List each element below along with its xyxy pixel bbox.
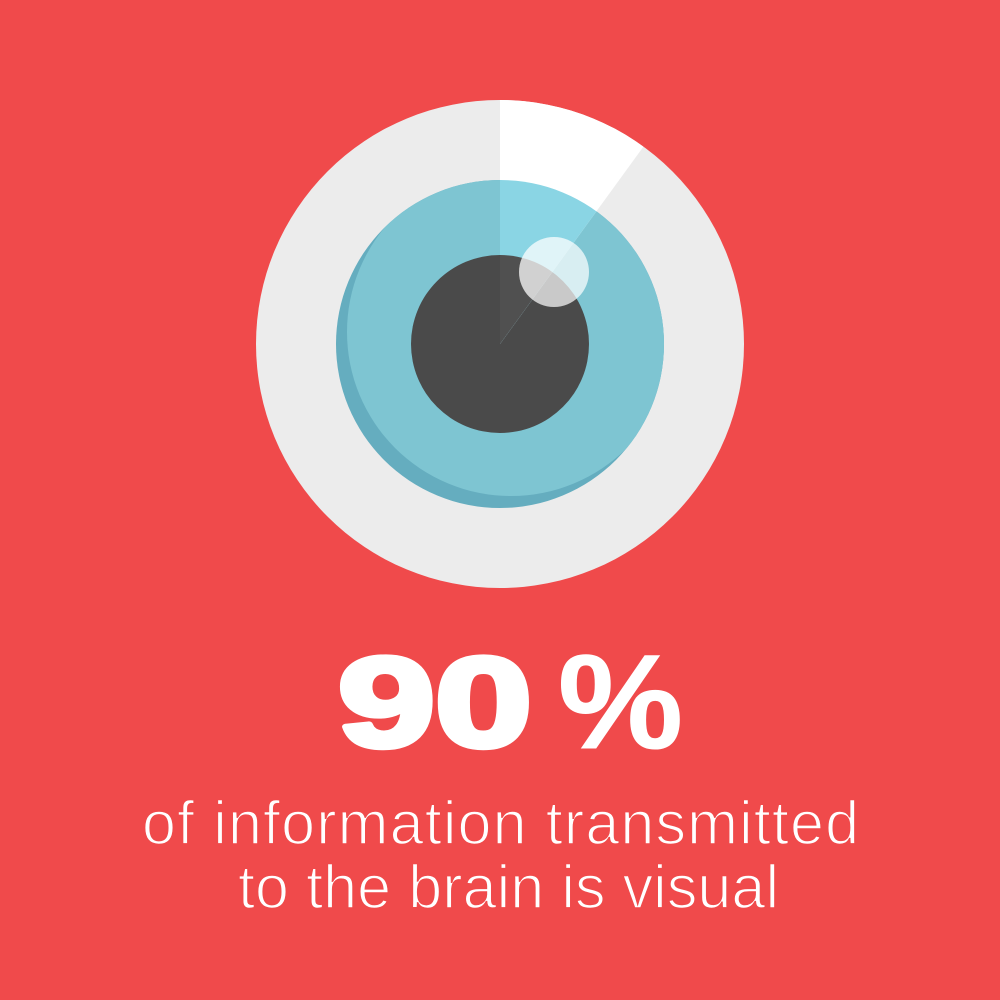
pupil	[411, 255, 589, 433]
caption: to the brain is visual	[238, 853, 779, 921]
headline: 90%	[338, 628, 683, 777]
icon: eye	[256, 100, 744, 588]
eye highlight	[519, 237, 589, 307]
eye white	[256, 100, 744, 588]
caption	[142, 789, 859, 921]
light wedge	[500, 100, 644, 344]
iris	[336, 168, 675, 508]
caption: of information transmitted	[142, 789, 859, 857]
headline: 90%: %	[558, 628, 683, 777]
headline: 90%: 90	[338, 631, 532, 773]
